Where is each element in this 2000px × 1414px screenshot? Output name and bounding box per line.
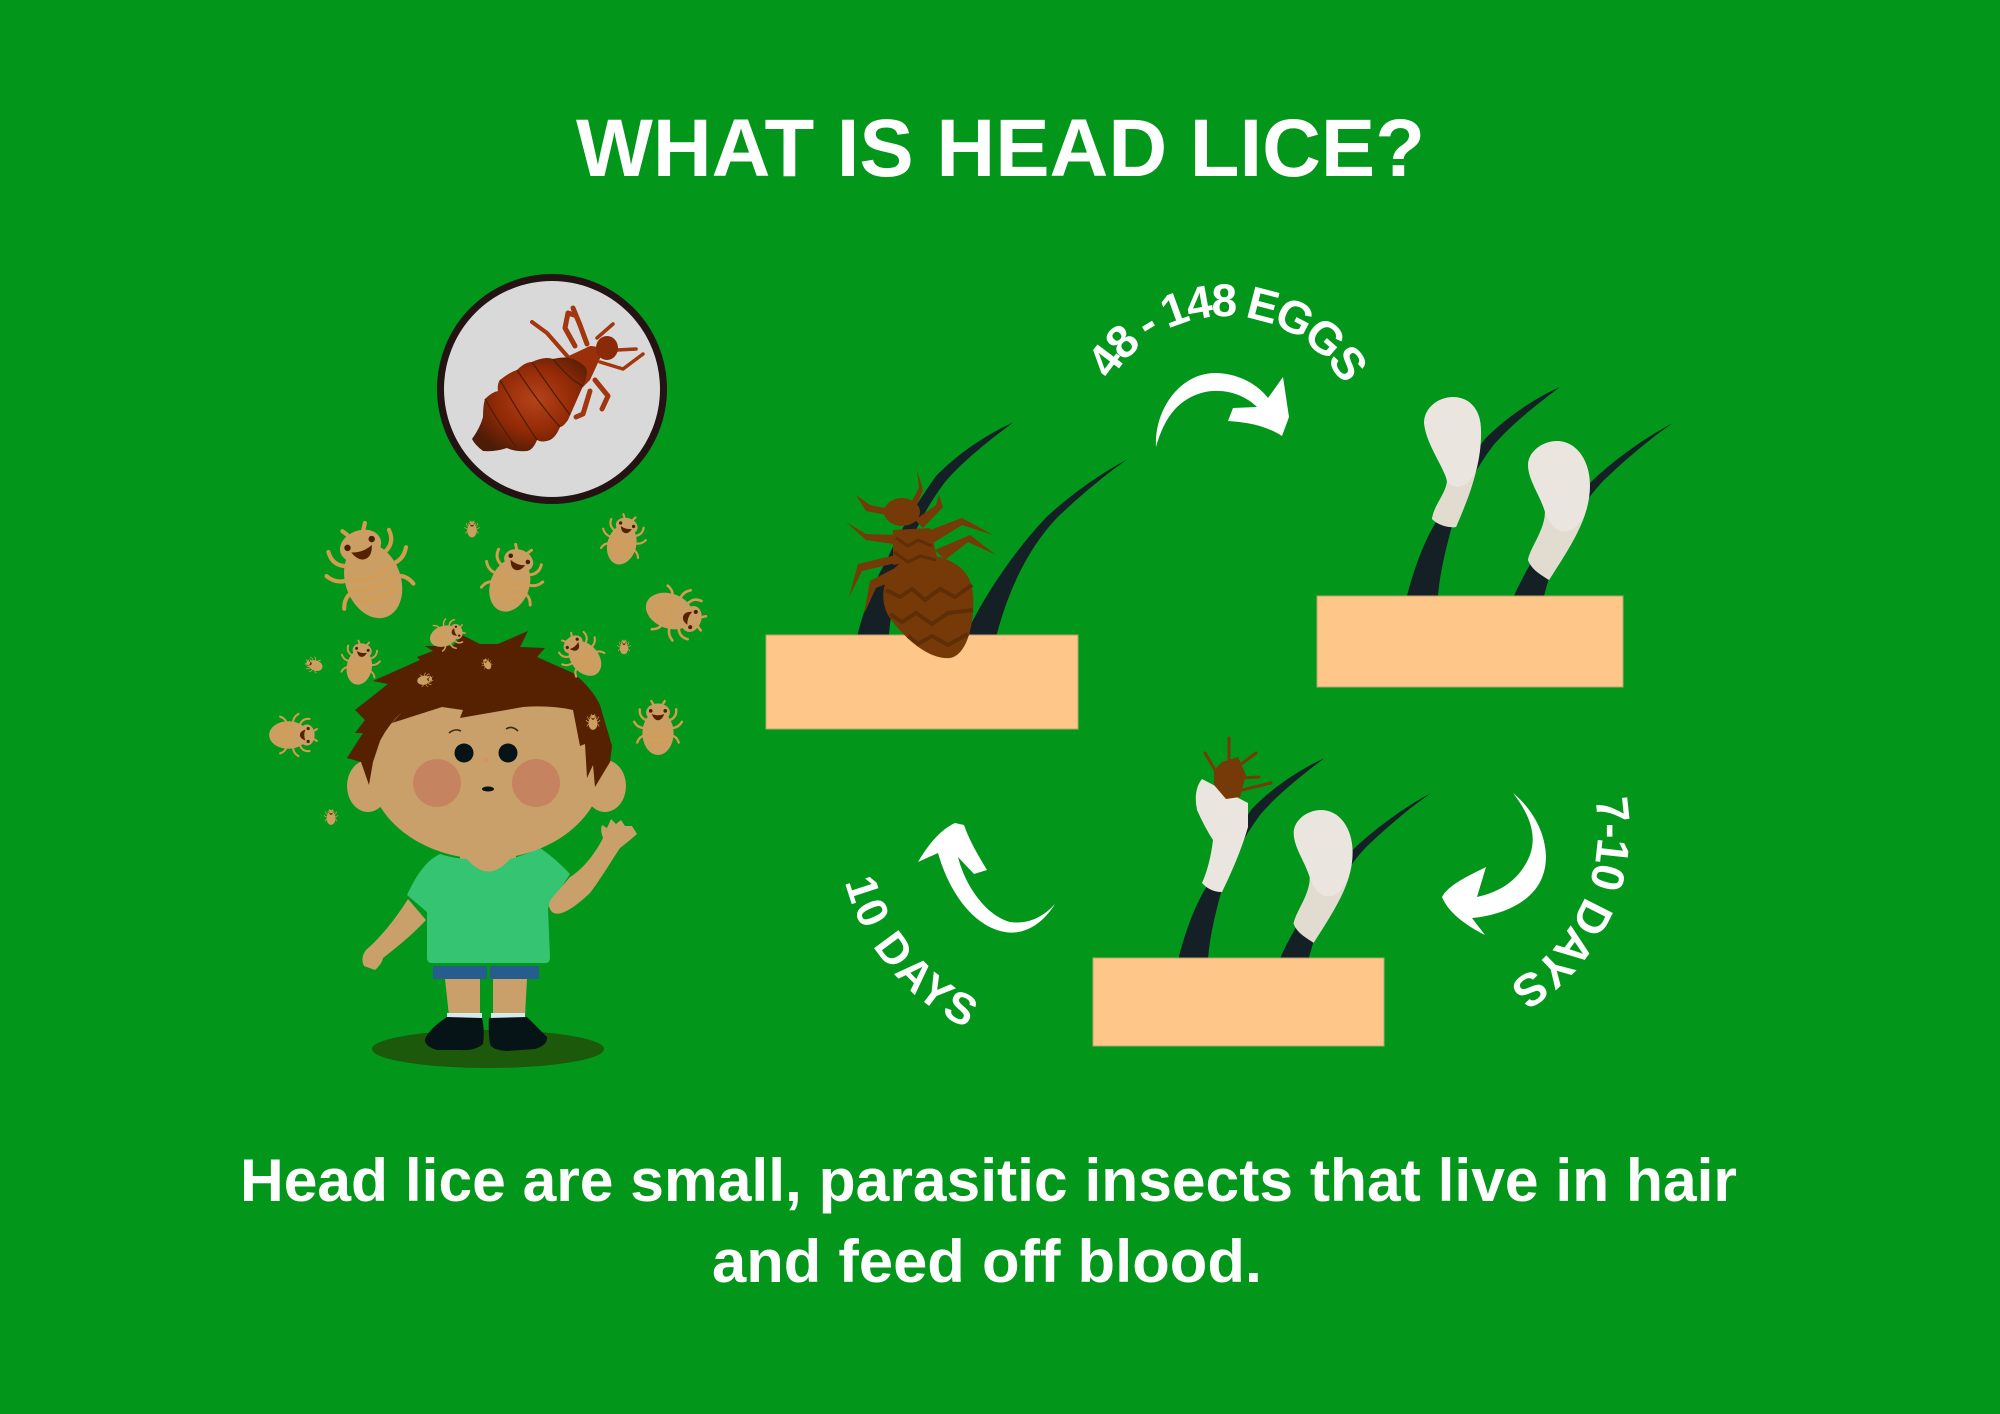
ears	[347, 760, 626, 812]
arrow: eggs hatch	[1442, 793, 1546, 935]
boy illustration	[347, 631, 637, 1068]
nose and mouth	[483, 758, 489, 762]
brown louse	[846, 470, 996, 658]
arrow: nymph matures	[918, 823, 1055, 933]
socks	[447, 1013, 525, 1019]
hatched egg	[1196, 779, 1248, 892]
icon: magnified louse in circle	[440, 278, 664, 500]
neck	[460, 845, 516, 877]
title: WHAT IS HEAD LICE?	[576, 103, 1425, 194]
hair strands	[1179, 758, 1432, 958]
shirt	[407, 848, 570, 963]
label: 10 days: 10 DAYS	[846, 877, 976, 1024]
arrow: louse lays eggs	[1156, 373, 1289, 447]
hair strands	[857, 423, 1128, 635]
right arm and hand	[549, 819, 637, 914]
nymph	[1205, 738, 1271, 799]
description text: Head lice are small, parasitic insects that live in hair	[240, 1147, 1737, 1214]
description text: and feed off blood.	[712, 1228, 1262, 1295]
ground shadow	[372, 1030, 604, 1068]
skin block	[1317, 596, 1623, 687]
hair strands	[1407, 387, 1673, 596]
face	[368, 671, 604, 859]
hair	[347, 631, 612, 787]
left arm	[362, 899, 426, 970]
shoes	[425, 1017, 547, 1051]
skin block	[766, 635, 1078, 729]
label: 7-10 days: 7-10 DAYS	[1514, 797, 1630, 1006]
stage: adult louse on hair	[766, 423, 1128, 729]
stage: nymph hatching from egg	[1093, 738, 1432, 1046]
intact egg	[1294, 810, 1353, 943]
cheeks	[413, 759, 461, 807]
stage: eggs on hair	[1317, 387, 1673, 687]
eyes	[454, 744, 474, 762]
legs	[445, 979, 527, 1016]
eyebrows	[449, 727, 518, 733]
swarm of cartoon lice	[269, 510, 712, 825]
skin block	[1093, 958, 1384, 1046]
description text	[240, 1147, 1737, 1295]
shorts	[433, 966, 539, 979]
label: 48 - 148 eggs: 48 - 148 EGGS	[1093, 284, 1366, 380]
eggs	[1424, 397, 1481, 527]
